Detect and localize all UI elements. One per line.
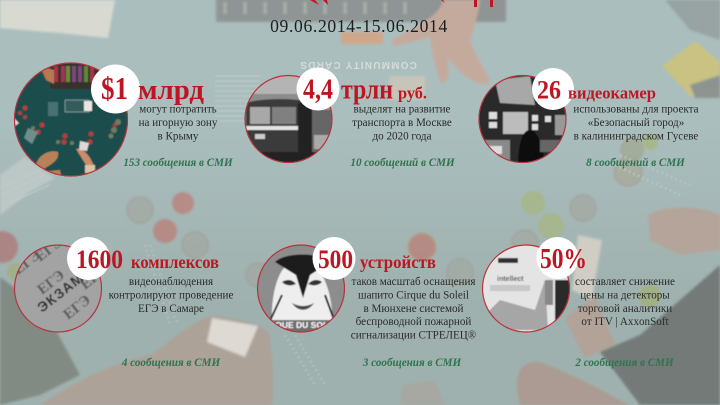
title remnants cropped at the top edge (310, 0, 493, 7)
background text: community cards: COMMUNITY CARDS (299, 59, 417, 70)
heading: 500 устройств: 500 (318, 245, 353, 274)
description: выделят на развитие (354, 104, 451, 116)
description: составляет снижение (575, 276, 675, 288)
description: видеонаблюдения (129, 276, 213, 288)
description: в Мюнхене системой (364, 303, 464, 315)
panel: Cirque du Soleil devices (256, 237, 476, 369)
photo: Intellect brochure: intellect (497, 276, 524, 283)
photo: exam tape: ЕГЭ (11, 247, 44, 278)
description: от ITV | AxxonSoft (581, 316, 669, 328)
media mentions: 153 сообщения в СМИ (123, 157, 233, 169)
panel: EGE exam monitoring (11, 234, 233, 369)
panel: ITV AxxonSoft detectors (481, 237, 675, 369)
number badge (67, 237, 110, 280)
description: «Безопасный город» (588, 117, 684, 129)
photo: Cirque du Soleil performer (258, 246, 344, 332)
photo: Cirque du Soleil performer: CIRQUE DU SOLEIL (261, 320, 341, 330)
number badge (91, 64, 140, 114)
number badge (532, 68, 574, 110)
media mentions: 10 сообщений в СМИ (350, 157, 455, 169)
heading: 1600 комплексов (76, 245, 219, 274)
photo: exam tape: ЕГЭ (78, 262, 111, 293)
description: цены на детекторы (580, 290, 670, 302)
heading: 26 видеокамер: видеокамер (568, 84, 656, 102)
photo: exam tape: ЕГЭ (61, 292, 94, 323)
heading: 50%: 50% (540, 244, 587, 275)
heading: $1 млрд: $1 (101, 70, 128, 106)
media mentions: 2 сообщения в СМИ (574, 357, 674, 369)
description: в калининградском Гусеве (574, 130, 698, 142)
description: транспорта в Москве (352, 117, 452, 129)
heading: 500 устройств: устройств (360, 252, 436, 272)
description: использованы для проекта (573, 104, 699, 116)
description: сигнализации СТРЕЛЕЦ® (351, 330, 476, 342)
photo: exam tape: ЕГЭ (35, 267, 68, 298)
heading: 26 видеокамер: 26 (537, 76, 561, 104)
description: таков масштаб оснащения (351, 276, 476, 288)
description: ЕГЭ в Самаре (138, 303, 204, 315)
number badge (536, 237, 578, 279)
date range: 09.06.2014-15.06.2014 (270, 16, 448, 36)
media mentions: 4 сообщения в СМИ (121, 357, 220, 369)
number badge (296, 68, 340, 110)
media mentions: 3 сообщения в СМИ (362, 357, 461, 369)
description: шапито Cirque du Soleil (358, 290, 469, 302)
description: в Крыму (158, 130, 199, 142)
description: контролируют проведение (109, 290, 233, 302)
panel: Safe City cameras (478, 68, 699, 169)
description: до 2020 года (372, 130, 432, 142)
heading: $1 млрд: млрд (138, 74, 204, 106)
photo: casino table from above (14, 62, 128, 176)
panel: gambling zone in Crimea (10, 60, 233, 180)
photo: Intellect brochure (481, 244, 571, 335)
photo: exam tape: ЕГЭ (33, 234, 66, 265)
heading: 4,4 трлн руб.: трлн (341, 74, 393, 106)
heading: 4,4 трлн руб.: 4,4 (303, 74, 333, 106)
number badge (312, 237, 356, 280)
heading: 500 устройств (318, 245, 436, 274)
heading: 1600 комплексов: комплексов (131, 252, 219, 272)
heading: $1 млрд (101, 70, 204, 106)
photo: trolleybus (244, 74, 334, 164)
description: на игорную зону (139, 117, 218, 129)
photo: exam tape: ЭКЗАМ (34, 269, 87, 315)
heading: 1600 комплексов: 1600 (76, 245, 123, 274)
photo: control room (478, 74, 568, 165)
panel: Moscow transport (244, 68, 455, 169)
heading: 4,4 трлн руб.: руб. (398, 84, 427, 102)
media mentions: 8 сообщений в СМИ (586, 157, 685, 169)
description: торговой аналитики (578, 303, 672, 315)
heading: 26 видеокамер (537, 76, 656, 104)
heading: 4,4 трлн руб. (303, 74, 427, 106)
description: беспроводной пожарной (356, 316, 471, 328)
photo: exam tape (15, 246, 101, 332)
description: могут потратить (139, 104, 217, 116)
